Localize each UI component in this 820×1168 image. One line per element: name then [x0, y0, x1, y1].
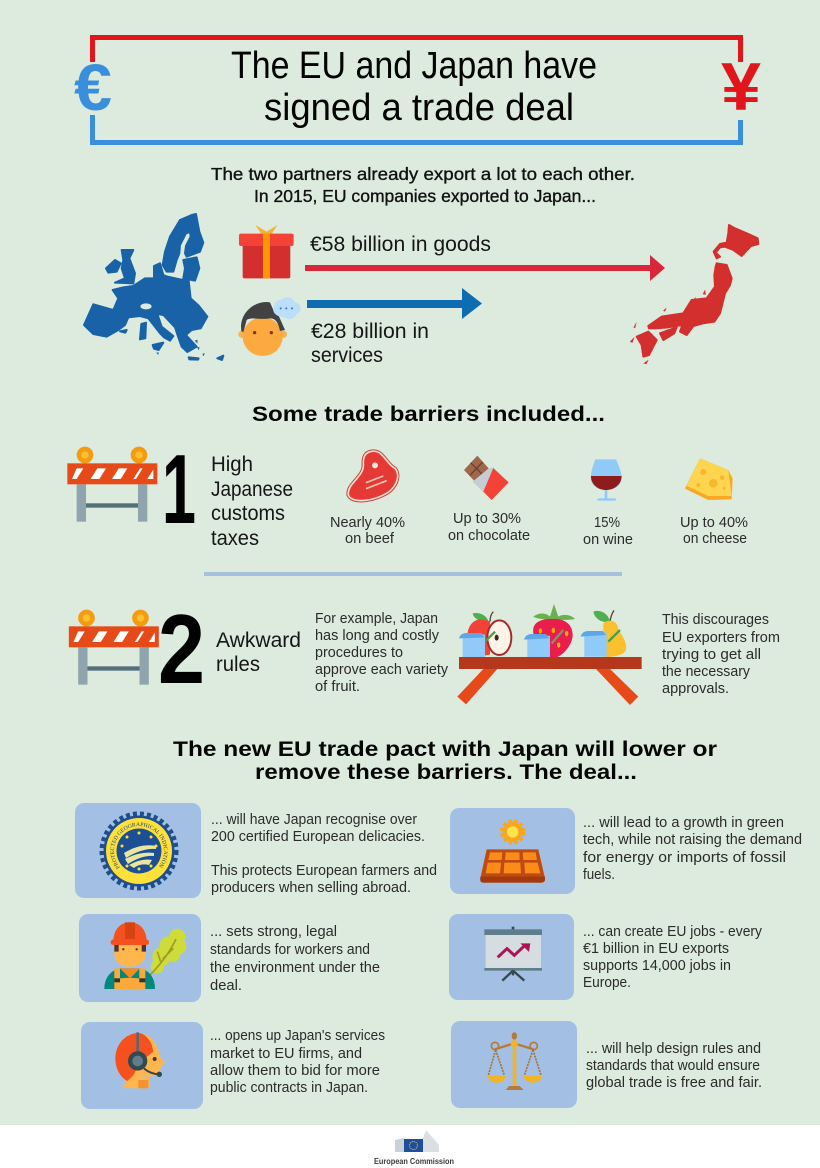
discourages exporters text: trying to get all: [662, 647, 761, 663]
services label: services: [311, 344, 383, 367]
chocolate tax: Up to 30%: [453, 511, 521, 527]
title: [231, 45, 597, 129]
barrier 1 label: customs: [211, 502, 285, 525]
text: services: allow them to bid for more: [210, 1063, 380, 1079]
title: The EU and Japan have: [231, 45, 597, 87]
chocolate tax: on chocolate: [448, 528, 530, 544]
discourages exporters text: [662, 612, 780, 697]
text: services: ... opens up Japan's services: [210, 1028, 385, 1044]
text: standards: the environment under the: [210, 960, 380, 976]
icon: cheese: [685, 458, 733, 500]
cheese tax: Up to 40%: [680, 515, 748, 531]
icon: yen sign: ¥: [721, 49, 761, 125]
intro text: [211, 164, 635, 206]
cheese tax: on cheese: [683, 531, 747, 547]
text: standards: [210, 924, 380, 994]
text: green tech: for energy or imports of fossil: [583, 850, 786, 866]
text: services: market to EU firms, and: [210, 1046, 362, 1062]
barrier 2 label: Awkward: [216, 629, 301, 652]
text: services: [210, 1028, 385, 1096]
icon: headset person: [115, 1032, 165, 1088]
heading: the deal: The new EU trade pact with Japan will lower or: [173, 738, 717, 761]
discourages exporters text: This discourages: [662, 612, 769, 628]
barrier 1 label: Japanese: [211, 478, 293, 501]
wine tax: [583, 515, 633, 548]
goods label: €58 billion in goods: [310, 233, 491, 256]
services label: [311, 320, 429, 367]
icon: PGI seal: PROTECTED GEOGRAPHICAL INDICATION: [110, 822, 168, 870]
logo: European Commission: [374, 1130, 454, 1166]
barrier 2 label: [216, 629, 301, 676]
panel: jobs: [449, 914, 574, 1000]
icon: worker and leaf: [104, 922, 186, 989]
discourages exporters text: approvals.: [662, 681, 729, 697]
text: global rules: standards that would ensure: [586, 1058, 760, 1074]
logo: European Commission: European Commission: [374, 1157, 454, 1166]
number 2: 2: [158, 594, 205, 704]
panel: geographical indication: [75, 803, 201, 898]
fruit approval text: of fruit.: [315, 679, 360, 695]
icon: roadblock 1: [67, 447, 157, 522]
text: global rules: global trade is free and fair.: [586, 1075, 762, 1091]
arrow: services: [307, 288, 482, 319]
panel: global rules: [451, 1021, 577, 1108]
text: green tech: [583, 815, 802, 883]
number 1: 1: [162, 434, 196, 544]
beef tax: Nearly 40%: [330, 515, 405, 531]
title: signed a trade deal: [264, 87, 574, 129]
fruit approval text: has long and costly: [315, 628, 440, 644]
panel: green tech: [450, 808, 575, 894]
heading: trade barriers: Some trade barriers included...: [252, 403, 605, 426]
map: Europe: [84, 214, 223, 360]
text: green tech: fuels.: [583, 867, 615, 883]
text: delicacies: 200 certified European delicacies.: [211, 829, 425, 845]
icon: beef: [348, 451, 398, 501]
icon: scales: [488, 1032, 542, 1090]
icon: presentation chart: [484, 927, 542, 981]
icon: chocolate: [464, 456, 509, 500]
intro text: The two partners already export a lot to each other.: [211, 164, 635, 184]
beef tax: on beef: [345, 531, 395, 547]
text: global rules: [586, 1041, 762, 1091]
title frame: [92, 38, 740, 142]
text: delicacies: producers when selling abroad.: [211, 880, 411, 896]
fruit approval text: [315, 611, 449, 695]
barrier 1 label: High: [211, 453, 253, 476]
icon: man thinking: [238, 297, 301, 356]
discourages exporters text: EU exporters from: [662, 630, 780, 646]
text: services: public contracts in Japan.: [210, 1080, 368, 1096]
intro text: In 2015, EU companies exported to Japan...: [254, 186, 596, 206]
barrier 1 label: [211, 453, 293, 550]
barrier 1 label: taxes: [211, 527, 259, 550]
text: jobs: supports 14,000 jobs in: [583, 958, 731, 974]
icon: solar panel: [480, 822, 545, 883]
text: jobs: Europe.: [583, 975, 631, 991]
panel: services market: [81, 1022, 203, 1109]
text: delicacies: ... will have Japan recognise over: [211, 812, 417, 828]
heading: the deal: remove these barriers. The deal...: [255, 761, 637, 784]
fruit approval text: procedures to: [315, 645, 403, 661]
text: global rules: ... will help design rules and: [586, 1041, 761, 1057]
panel: worker standards: [79, 914, 201, 1002]
map: Japan: [630, 225, 758, 364]
discourages exporters text: the necessary: [662, 664, 751, 680]
wine tax: 15%: [594, 515, 620, 531]
cheese tax: [680, 515, 748, 547]
icon: euro sign: €: [74, 50, 112, 124]
icon: fruit on table: [457, 604, 642, 705]
fruit approval text: approve each variety: [315, 662, 449, 678]
arrow: goods: [305, 255, 665, 281]
fruit approval text: For example, Japan: [315, 611, 438, 627]
barrier 2 label: rules: [216, 653, 260, 676]
chocolate tax: [448, 511, 530, 544]
text: delicacies: [211, 812, 437, 896]
services label: €28 billion in: [311, 320, 429, 343]
footer: [0, 1125, 820, 1168]
text: jobs: €1 billion in EU exports: [583, 941, 729, 957]
wine tax: on wine: [583, 532, 633, 548]
icon: roadblock 2: [69, 610, 159, 685]
text: green tech: ... will lead to a growth in green: [583, 815, 784, 831]
text: delicacies: This protects European farmers and: [211, 863, 437, 879]
heading: the deal: [173, 738, 717, 784]
icon: wine glass: [591, 459, 622, 501]
text: green tech: tech, while not raising the demand: [583, 832, 802, 848]
beef tax: [330, 515, 405, 547]
text: standards: standards for workers and: [210, 942, 370, 958]
text: standards: deal.: [210, 978, 242, 994]
text: standards: ... sets strong, legal: [210, 924, 337, 940]
icon: gift: [239, 225, 294, 278]
text: jobs: ... can create EU jobs - every: [583, 924, 763, 940]
text: jobs: [583, 924, 763, 991]
